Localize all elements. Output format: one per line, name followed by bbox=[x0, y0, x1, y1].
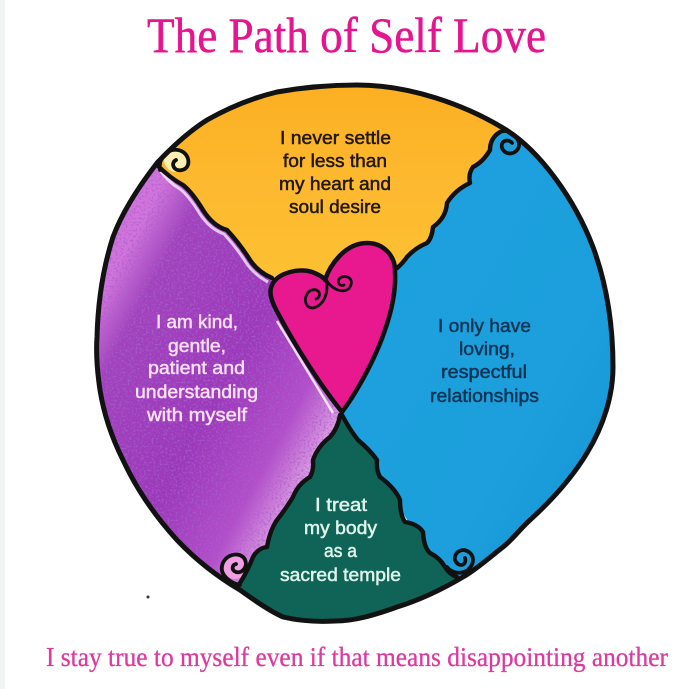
text: yellow segment: I never settle bbox=[280, 128, 391, 148]
text: yellow segment bbox=[279, 128, 391, 217]
text: purple segment: with myself bbox=[146, 405, 248, 425]
circle diagram bbox=[94, 82, 616, 624]
text: yellow segment: soul desire bbox=[289, 197, 381, 217]
circle outline bbox=[97, 85, 613, 621]
spiral backgrounds bbox=[164, 148, 188, 172]
panel: blue segment bbox=[344, 129, 610, 576]
heart bbox=[270, 243, 395, 412]
painted segments bbox=[99, 88, 610, 619]
text: yellow segment: my heart and bbox=[279, 174, 391, 194]
text: purple segment bbox=[135, 312, 258, 425]
title: The Path of Self Love bbox=[147, 7, 546, 63]
text: teal segment: I treat bbox=[315, 495, 367, 515]
text: purple segment: I am kind, bbox=[156, 312, 238, 332]
panel: purple speckle bbox=[100, 168, 339, 582]
heart spirals bbox=[305, 276, 351, 308]
text: blue segment: I only have bbox=[438, 316, 531, 336]
text: purple segment: gentle, bbox=[168, 336, 226, 356]
text: blue segment: relationships bbox=[430, 386, 539, 406]
text: teal segment bbox=[280, 495, 401, 585]
text: yellow segment: for less than bbox=[283, 151, 387, 171]
text: blue segment: respectful bbox=[441, 362, 527, 382]
text: purple segment: understanding bbox=[135, 382, 258, 402]
panel: yellow segment bbox=[162, 88, 500, 278]
bottom caption: I stay true to myself even if that means disappointing another bbox=[46, 642, 668, 672]
text: blue segment: loving, bbox=[459, 339, 515, 359]
corner spirals bbox=[160, 131, 519, 585]
wavy dividers bbox=[157, 132, 500, 583]
text: blue segment bbox=[430, 316, 539, 406]
panel: teal segment bbox=[239, 418, 456, 619]
text: teal segment: my body bbox=[304, 518, 377, 538]
ink speck bbox=[146, 596, 150, 598]
text: teal segment: as a bbox=[324, 541, 358, 561]
text: purple segment: patient and bbox=[148, 358, 245, 378]
white paint gaps bbox=[160, 170, 268, 282]
text: teal segment: sacred temple bbox=[280, 565, 401, 585]
